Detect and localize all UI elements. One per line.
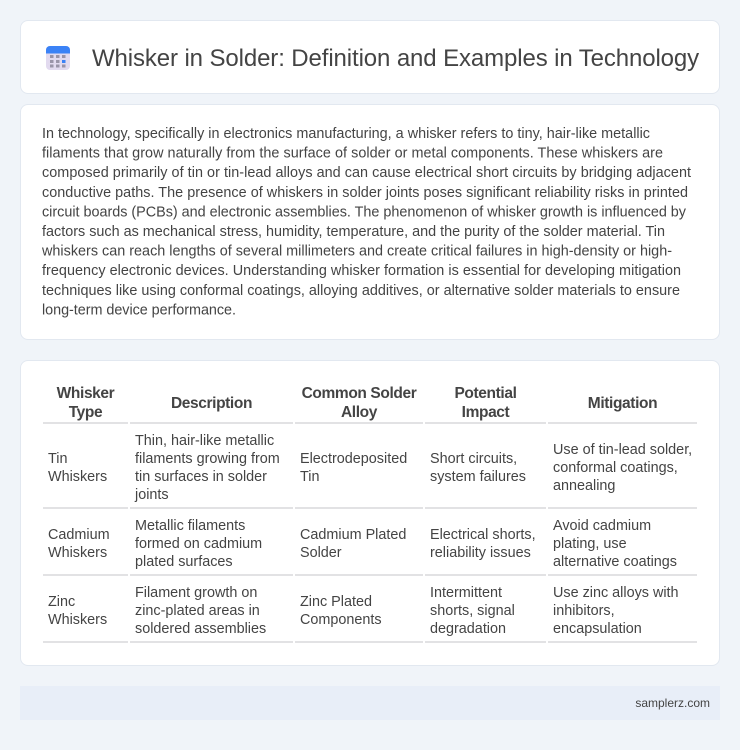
row: zinc whiskers: inhibitors, <box>553 603 615 619</box>
row: cadmium whiskers: Whiskers <box>48 545 107 561</box>
table header <box>56 385 657 421</box>
row: zinc whiskers: encapsulation <box>553 621 642 637</box>
row: cadmium whiskers: plating, use <box>553 536 627 552</box>
panel: intro paragraph <box>20 104 720 340</box>
panel: intro paragraph: frequency electronic devices. Understanding whisker formation is essential for developing mitigation <box>42 263 681 279</box>
row: tin whiskers: annealing <box>553 478 615 494</box>
row: cadmium whiskers: alternative coatings <box>553 554 677 570</box>
row: cadmium whiskers: Solder <box>300 545 342 561</box>
row: tin whiskers: tin surfaces in solder <box>135 469 267 485</box>
panel: intro paragraph: factors such as mechanical stress, humidity, temperature, and the purity of the solder material. Tin <box>42 224 665 240</box>
table header: Mitigation <box>588 395 657 412</box>
row: zinc whiskers: zinc-plated areas in <box>135 603 260 619</box>
panel: intro paragraph: composed primarily of tin or tin-lead alloys and can cause electrical short circuits by bridging adjacent <box>42 165 691 181</box>
panel: intro paragraph: filaments that grow naturally from the surface of solder or metal components. These whiskers are <box>42 146 663 162</box>
panel: intro paragraph: long-term device performance. <box>42 302 236 318</box>
row: tin whiskers: Short circuits, <box>430 451 517 467</box>
row: tin whiskers: filaments growing from <box>135 451 280 467</box>
row: tin whiskers: Tin <box>300 469 319 485</box>
row: cadmium whiskers: plated surfaces <box>135 554 233 570</box>
row: tin whiskers: joints <box>135 487 169 503</box>
row: zinc whiskers: Whiskers <box>48 612 107 628</box>
panel: intro paragraph: In technology, specifically in electronics manufacturing, a whisker refers to tiny, hair-like metallic <box>42 126 650 142</box>
panel: intro paragraph: circuit boards (PCBs) and electronic assemblies. The phenomenon of whisker growth is influenced by <box>42 204 687 220</box>
panel: intro paragraph: conductive paths. The presence of whiskers in solder joints poses significant reliability risks in printed <box>42 185 688 201</box>
row: cadmium whiskers: reliability issues <box>430 545 531 561</box>
row: zinc whiskers: degradation <box>430 621 506 637</box>
footer text: samplerz.com <box>635 696 710 710</box>
footer bar <box>20 686 720 720</box>
row: zinc whiskers: shorts, signal <box>430 603 515 619</box>
row: cadmium whiskers: Avoid cadmium <box>553 518 651 534</box>
row: cadmium whiskers: Metallic filaments <box>135 518 245 534</box>
table header: Type <box>69 404 102 421</box>
icon: calendar <box>46 46 70 70</box>
row: zinc whiskers: Components <box>300 612 382 628</box>
row: cadmium whiskers: Cadmium Plated <box>300 527 406 543</box>
row: zinc whiskers: Zinc <box>48 594 75 610</box>
table header: Potential <box>454 385 517 402</box>
row: cadmium whiskers: Electrical shorts, <box>430 527 536 543</box>
row: tin whiskers: Electrodeposited <box>300 451 407 467</box>
row: zinc whiskers: Intermittent <box>430 585 502 601</box>
row: tin whiskers: conformal coatings, <box>553 460 678 476</box>
panel: intro paragraph: techniques like using conformal coatings, alloying additives, or alternative solder materials to ensure <box>42 283 680 299</box>
row: tin whiskers: system failures <box>430 469 526 485</box>
row: zinc whiskers: Filament growth on <box>135 585 257 601</box>
row: zinc whiskers: Zinc Plated <box>300 594 372 610</box>
table header: Description <box>171 395 252 412</box>
table header: Impact <box>462 404 509 421</box>
row: cadmium whiskers: Cadmium <box>48 527 110 543</box>
table header: Whisker <box>57 385 114 402</box>
table header: Alloy <box>341 404 377 421</box>
panel: whisker table <box>20 360 720 666</box>
row: tin whiskers <box>48 433 692 503</box>
row: zinc whiskers: Use zinc alloys with <box>553 585 679 601</box>
row: tin whiskers: Thin, hair-like metallic <box>135 433 274 449</box>
heading: Whisker in Solder: Definition and Examples in Technology <box>92 45 699 72</box>
row: tin whiskers: Tin <box>48 451 67 467</box>
row: tin whiskers: Whiskers <box>48 469 107 485</box>
title card <box>20 20 720 94</box>
row: cadmium whiskers <box>48 518 677 570</box>
row: zinc whiskers <box>48 585 679 637</box>
table header: Common Solder <box>302 385 416 402</box>
row: cadmium whiskers: formed on cadmium <box>135 536 262 552</box>
row: tin whiskers: Use of tin-lead solder, <box>553 442 692 458</box>
row: zinc whiskers: soldered assemblies <box>135 621 266 637</box>
panel: intro paragraph: whiskers can reach lengths of several millimeters and create critical failures in high-density or high- <box>41 244 672 260</box>
